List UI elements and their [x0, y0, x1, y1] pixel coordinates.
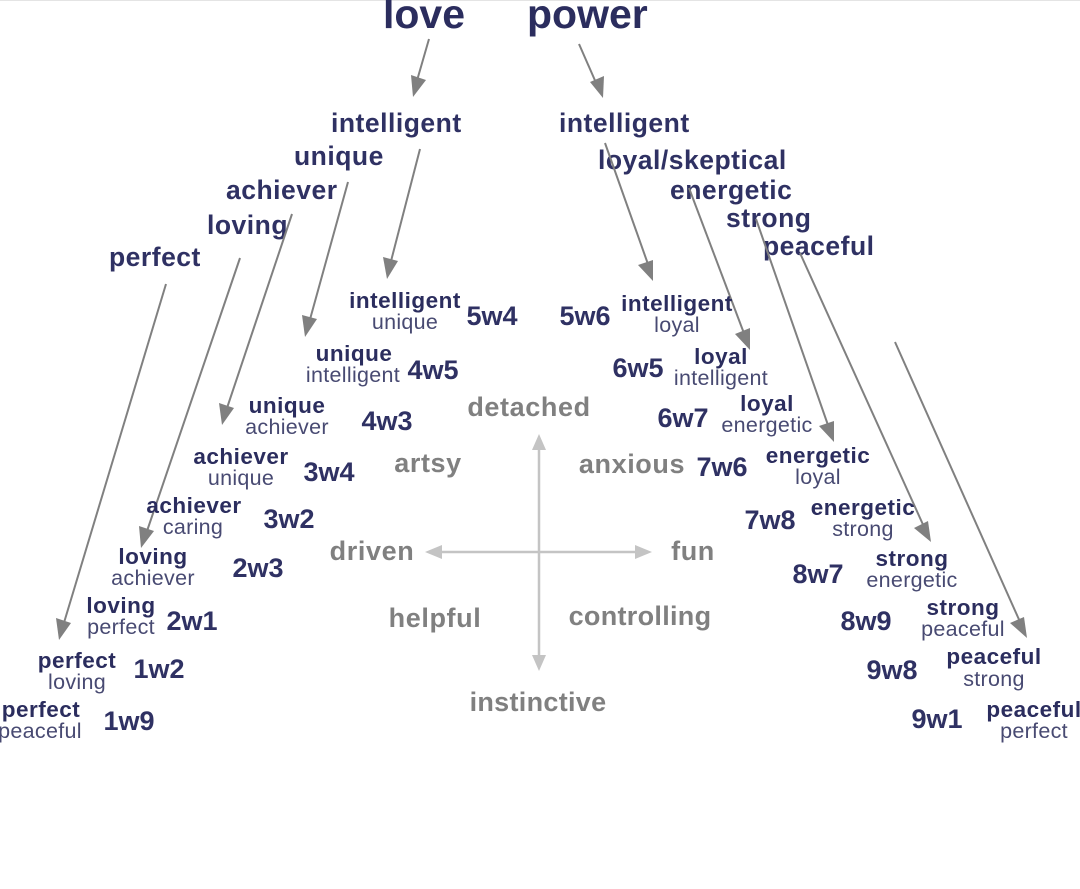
left column of type labels: loving	[207, 210, 288, 240]
center grey trait labels: artsy	[394, 448, 462, 478]
right wing labels: intelligent	[621, 291, 733, 316]
center grey trait labels: instinctive	[470, 687, 606, 717]
left wing labels: 4w3	[361, 406, 413, 436]
left wing labels: loving	[86, 593, 156, 618]
left wing labels: achiever	[111, 566, 195, 590]
right wing labels: loyal	[654, 313, 700, 337]
center grey trait labels: fun	[671, 536, 715, 566]
left wing labels: perfect	[87, 615, 155, 639]
center grey trait labels: controlling	[569, 601, 711, 631]
right wing labels: loyal	[740, 391, 794, 416]
left column of type labels: perfect	[109, 242, 201, 272]
right wing labels: perfect	[1000, 719, 1068, 743]
left column of type labels	[109, 108, 462, 272]
right wing labels: peaceful	[921, 617, 1005, 641]
right wing labels: energetic	[866, 568, 958, 592]
right column of type labels: strong	[726, 203, 811, 233]
center grey trait labels	[330, 392, 715, 717]
right column of type labels	[559, 108, 875, 261]
left wing labels: unique	[316, 341, 392, 366]
left wing labels: achiever	[245, 415, 329, 439]
left wing labels: 5w4	[466, 301, 518, 331]
right wing labels: 6w5	[612, 353, 664, 383]
right wing labels: 8w9	[840, 606, 892, 636]
center grey trait labels: detached	[467, 392, 591, 422]
arrows: grey diagonals	[56, 39, 1027, 640]
right wing labels: energetic	[721, 413, 813, 437]
right column of type labels: energetic	[670, 175, 792, 205]
right wing labels: loyal	[795, 465, 841, 489]
left wing labels: intelligent	[306, 363, 400, 387]
right wing labels: 8w7	[792, 559, 844, 589]
left column of type labels: achiever	[226, 175, 338, 205]
right wing labels: loyal	[694, 344, 748, 369]
left wing labels: 4w5	[407, 355, 459, 385]
left wing labels: loving	[118, 544, 188, 569]
left wing labels: unique	[372, 310, 438, 334]
right wing labels: peaceful	[946, 644, 1042, 669]
right wing labels: 9w8	[866, 655, 918, 685]
right wing labels: strong	[926, 595, 1000, 620]
right wing labels: strong	[832, 517, 894, 541]
top edge line	[0, 0, 1080, 1]
right column of type labels: loyal/skeptical	[598, 145, 787, 175]
left column of type labels: intelligent	[331, 108, 462, 138]
right wing labels: 5w6	[559, 301, 611, 331]
right column of type labels: intelligent	[559, 108, 690, 138]
right wing labels: 9w1	[911, 704, 963, 734]
left wing labels: 3w2	[263, 504, 315, 534]
left wing labels: perfect	[2, 697, 80, 722]
right wing labels	[559, 291, 1080, 743]
left wing labels: 2w3	[232, 553, 284, 583]
left wing labels: intelligent	[349, 288, 461, 313]
left wing labels: unique	[208, 466, 274, 490]
right wing labels: energetic	[766, 443, 870, 468]
left wing labels: caring	[163, 515, 223, 539]
left wing labels: 1w2	[133, 654, 185, 684]
center grey trait labels: helpful	[389, 603, 481, 633]
left wing labels: 1w9	[103, 706, 155, 736]
left wing labels: peaceful	[0, 719, 82, 743]
right wing labels: 7w8	[744, 505, 796, 535]
left wing labels	[0, 288, 518, 743]
left wing labels: loving	[48, 670, 106, 694]
right wing labels: strong	[963, 667, 1025, 691]
left wing labels: perfect	[38, 648, 116, 673]
center cross axes	[425, 434, 652, 671]
right column of type labels: peaceful	[763, 231, 875, 261]
left wing labels: unique	[249, 393, 325, 418]
right wing labels: peaceful	[986, 697, 1080, 722]
center grey trait labels: driven	[330, 536, 414, 566]
center grey trait labels: anxious	[579, 449, 685, 479]
left wing labels: achiever	[193, 444, 289, 469]
left wing labels: 3w4	[303, 457, 355, 487]
right wing labels: 6w7	[657, 403, 709, 433]
right wing labels: 7w6	[696, 452, 748, 482]
right wing labels: strong	[876, 546, 948, 571]
left column of type labels: unique	[294, 141, 384, 171]
right wing labels: intelligent	[674, 366, 768, 390]
left wing labels: achiever	[146, 493, 242, 518]
right wing labels: energetic	[811, 495, 915, 520]
left wing labels: 2w1	[166, 606, 218, 636]
